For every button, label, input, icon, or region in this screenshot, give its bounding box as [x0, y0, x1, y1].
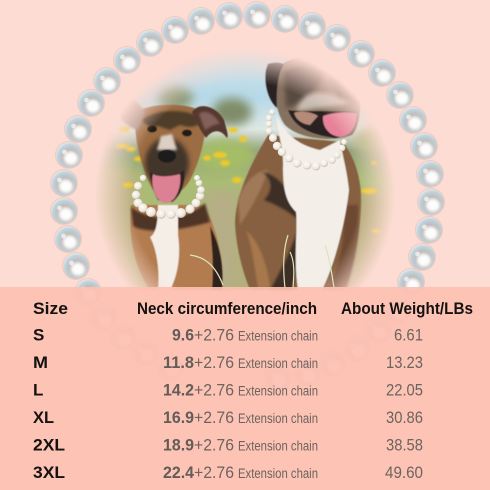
row S: +2.76: [194, 326, 234, 344]
row 3XL: 49.60: [385, 463, 423, 482]
right dog head: [274, 56, 360, 139]
row 2XL: 18.9: [163, 436, 194, 454]
row S: [33, 326, 423, 344]
right dog body: [235, 135, 361, 290]
row 2XL: +2.76: [194, 436, 234, 454]
right dog pearl collar: [266, 109, 347, 170]
row 3XL: [33, 463, 423, 482]
row 3XL: +2.76: [194, 463, 234, 482]
row XL: Extension chain: [238, 411, 318, 426]
row 3XL: Extension chain: [238, 466, 318, 481]
left dog ears: [122, 102, 146, 130]
right dog mouth and tongue: [288, 110, 356, 138]
right dog: [235, 56, 361, 290]
row XL: 16.9: [163, 408, 194, 427]
table header row: Size: [33, 299, 68, 318]
row 2XL: 38.58: [386, 436, 423, 454]
yellow flowers: [116, 126, 381, 233]
table header row: About Weight/LBs: [341, 299, 473, 318]
right dog white chest: [276, 115, 349, 290]
pearl necklace ring: [50, 1, 445, 392]
row M: +2.76: [194, 353, 234, 372]
row M: 11.8: [163, 353, 194, 372]
row L: 14.2: [163, 380, 194, 400]
left dog: [118, 99, 228, 290]
row M: Extension chain: [238, 356, 318, 371]
row M: M: [33, 353, 48, 372]
row XL: [33, 408, 423, 427]
left dog pearl collar: [132, 175, 205, 219]
row 2XL: 2XL: [33, 436, 65, 454]
grass stems: [190, 235, 334, 288]
row L: [33, 380, 423, 400]
row 2XL: Extension chain: [238, 438, 318, 454]
row S: Extension chain: [238, 328, 318, 344]
left dog eyes: [147, 126, 157, 132]
row S: S: [33, 326, 44, 344]
left dog body: [130, 205, 222, 290]
left dog mouth and tongue: [150, 170, 184, 202]
row M: 13.23: [386, 353, 423, 372]
row L: L: [33, 380, 43, 400]
row S: 9.6: [172, 326, 194, 344]
row L: Extension chain: [238, 384, 318, 398]
row 2XL: [33, 436, 423, 454]
left dog white chest: [150, 205, 179, 290]
row L: 22.05: [386, 380, 423, 400]
table header row: [33, 299, 473, 318]
row L: +2.76: [194, 380, 234, 400]
row M: [33, 353, 423, 372]
right dog ear: [265, 63, 284, 108]
row 3XL: 3XL: [33, 463, 65, 482]
row XL: 30.86: [386, 408, 423, 427]
photo: two dogs in a meadow: [90, 50, 400, 290]
panel background: [0, 287, 490, 490]
size table panel: [0, 287, 490, 490]
meadow background: [90, 50, 400, 290]
row XL: XL: [33, 408, 54, 427]
row S: 6.61: [394, 326, 423, 344]
row XL: +2.76: [194, 408, 234, 427]
row 3XL: 22.4: [163, 463, 195, 482]
left dog nose: [158, 150, 176, 162]
table header row: Neck circumference/inch: [137, 299, 317, 318]
left dog head: [135, 105, 206, 196]
